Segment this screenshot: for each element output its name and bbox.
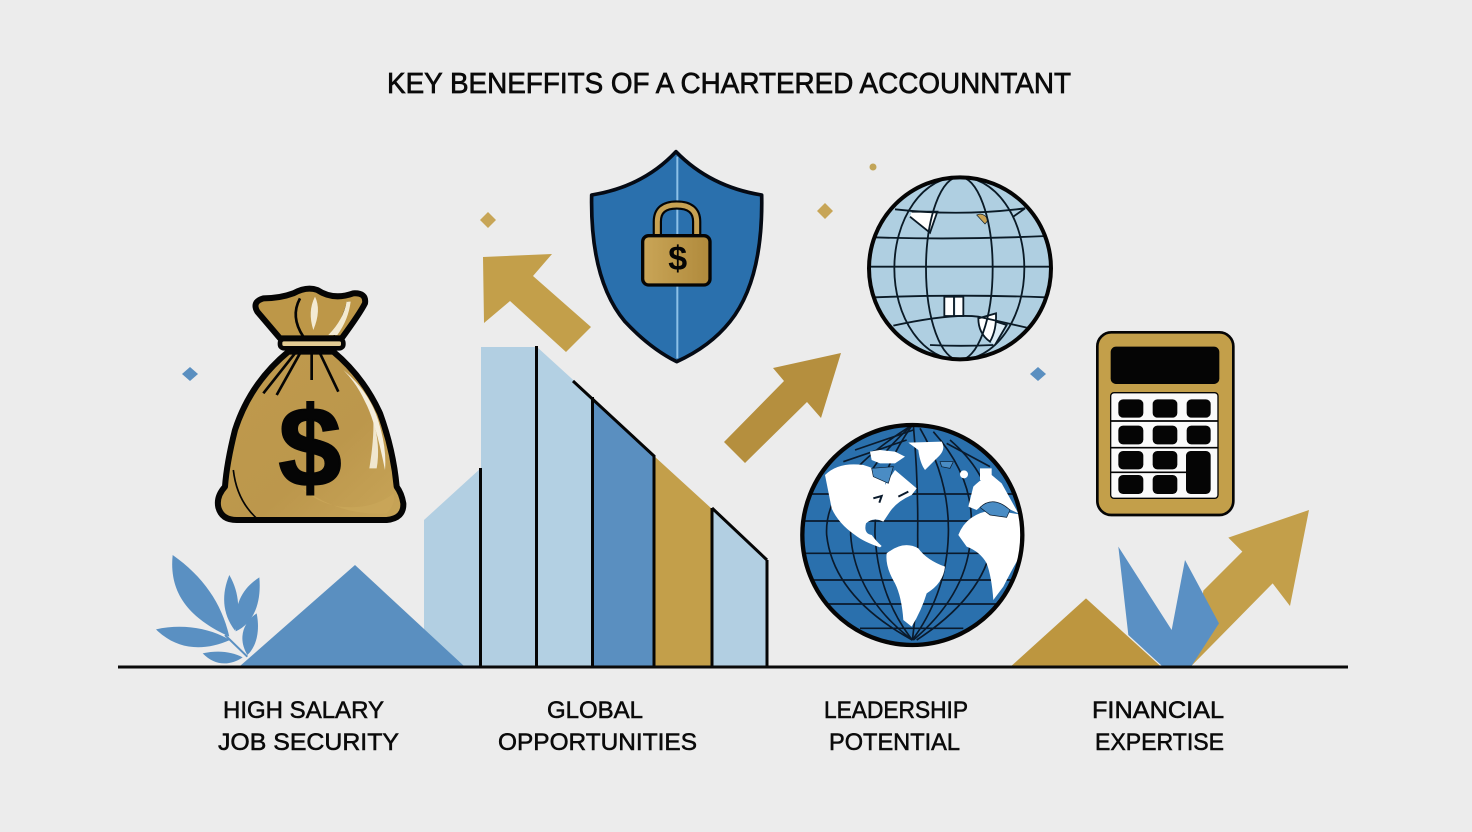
arrow: gold up-right [724,353,841,463]
icon: money bag [218,289,403,520]
label: high salary job security: HIGH SALARY [223,697,384,724]
blue mountain [240,565,464,666]
label: high salary job security: JOB SECURITY [218,729,399,756]
label: financial expertise [1092,697,1224,756]
continents [825,442,1023,627]
title: KEY BENEFFITS OF A CHARTERED ACCOUNNTANT [387,68,1071,100]
label: global opportunities: GLOBAL [547,697,643,724]
label: global opportunities: OPPORTUNITIES [498,729,697,756]
baseline [118,666,1348,668]
label: global opportunities [498,697,697,756]
label: leadership potential [824,697,968,756]
decorative diamonds [182,164,1046,381]
label: leadership potential: POTENTIAL [829,729,960,756]
growth arrow with peaks [1012,510,1309,666]
icon: money bag: $ [278,384,342,511]
label: high salary job security [218,697,399,756]
chart: stepped bars [424,346,767,666]
icon: leaves [156,555,260,663]
icon: calculator [1097,332,1233,515]
label: leadership potential: LEADERSHIP [824,697,968,724]
arrow: gold up-left [483,254,591,352]
label: financial expertise: EXPERTISE [1095,729,1224,756]
icon: shield with padlock [592,152,762,362]
icon: light globe [868,177,1052,360]
label: financial expertise: FINANCIAL [1092,697,1224,724]
icon: world globe [800,425,1027,645]
icon: shield with padlock: $ [668,240,687,278]
